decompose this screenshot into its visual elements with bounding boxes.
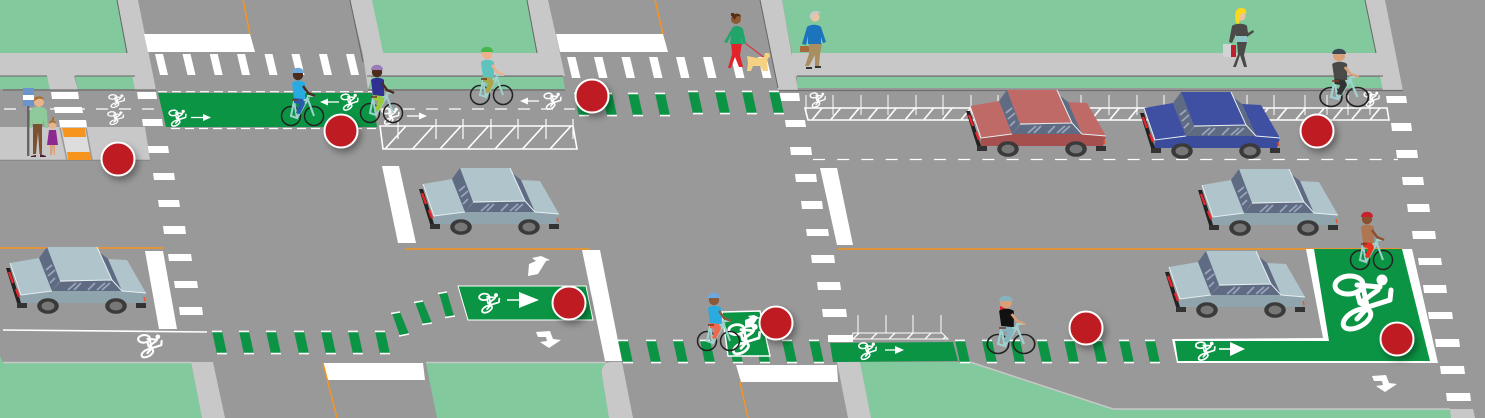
green two-stage turn box, south	[722, 311, 770, 356]
callout marker 8	[1380, 322, 1414, 356]
bike track centre dashes	[4, 108, 575, 110]
cyclist: red helmet in bike box	[1350, 212, 1392, 270]
green crossing dashes, north	[574, 91, 784, 116]
top-middle block: lawn and sidewalks	[350, 0, 565, 90]
pedestrian: man at bus stop	[30, 96, 48, 157]
callout marker 5	[552, 286, 586, 320]
cyclist: black shirt with red backpack	[987, 296, 1035, 354]
green bike lane, north-west	[158, 92, 377, 128]
callout marker 1	[102, 142, 134, 176]
hatched buffer, north-east	[805, 95, 1389, 120]
cyclist: purple helmet	[360, 65, 402, 122]
car: silver, lower right	[1165, 251, 1305, 318]
car: silver, upper left	[419, 168, 559, 235]
top-right block: lawn and sidewalks	[760, 0, 1403, 91]
green crossing dashes, south	[618, 340, 1160, 363]
hatched buffer, north-west	[380, 119, 577, 149]
bottom-left block: lawn and sidewalk	[0, 356, 225, 418]
pedestrian: child at bus stop	[47, 117, 58, 155]
callout marker 3	[576, 80, 608, 112]
road edge lines	[3, 89, 1403, 92]
crossing blocks, middle column	[779, 93, 847, 317]
cyclist: dark helmet on east track	[1320, 49, 1368, 106]
turn arrows	[528, 256, 1397, 392]
cyclist: south crossing, blue helmet	[698, 293, 740, 350]
pedestrian: woman with shopping bags	[1223, 8, 1254, 67]
direction arrows	[191, 98, 1245, 356]
car: red	[966, 90, 1106, 157]
crossing blocks, left column	[137, 92, 203, 315]
green crossing dashes, west	[212, 292, 455, 354]
callout marker 4	[1300, 114, 1334, 148]
green turn box, centre	[458, 286, 593, 320]
callout marker 6	[760, 306, 792, 340]
bottom-right block: lawn and sidewalk	[837, 362, 1475, 418]
car: silver, lower left	[6, 247, 146, 314]
bottom-middle block: lawn and sidewalk	[426, 362, 633, 418]
cyclist: blue helmet, south-bound on green lane	[282, 68, 324, 126]
crossing blocks, right column	[1386, 96, 1471, 401]
car: blue	[1140, 92, 1280, 159]
callout marker 2	[324, 114, 358, 148]
pedestrian: older man with bag	[800, 11, 826, 69]
bike stencils	[108, 92, 1391, 362]
pedestrian: woman walking dog	[724, 13, 770, 71]
green bike lane, south	[828, 335, 958, 362]
top-left block: lawn and sidewalks	[0, 0, 156, 90]
general lane dashes	[813, 158, 1398, 160]
crosswalk stripes, north leg	[155, 54, 772, 78]
cyclist: green helmet	[470, 47, 512, 104]
L-shaped green bike box	[1172, 249, 1438, 363]
car: silver, upper right	[1198, 169, 1338, 236]
callout marker 7	[1070, 312, 1102, 344]
hatched buffer, south	[852, 315, 948, 339]
bus stop island	[0, 92, 150, 160]
bus stop sign	[23, 88, 34, 156]
